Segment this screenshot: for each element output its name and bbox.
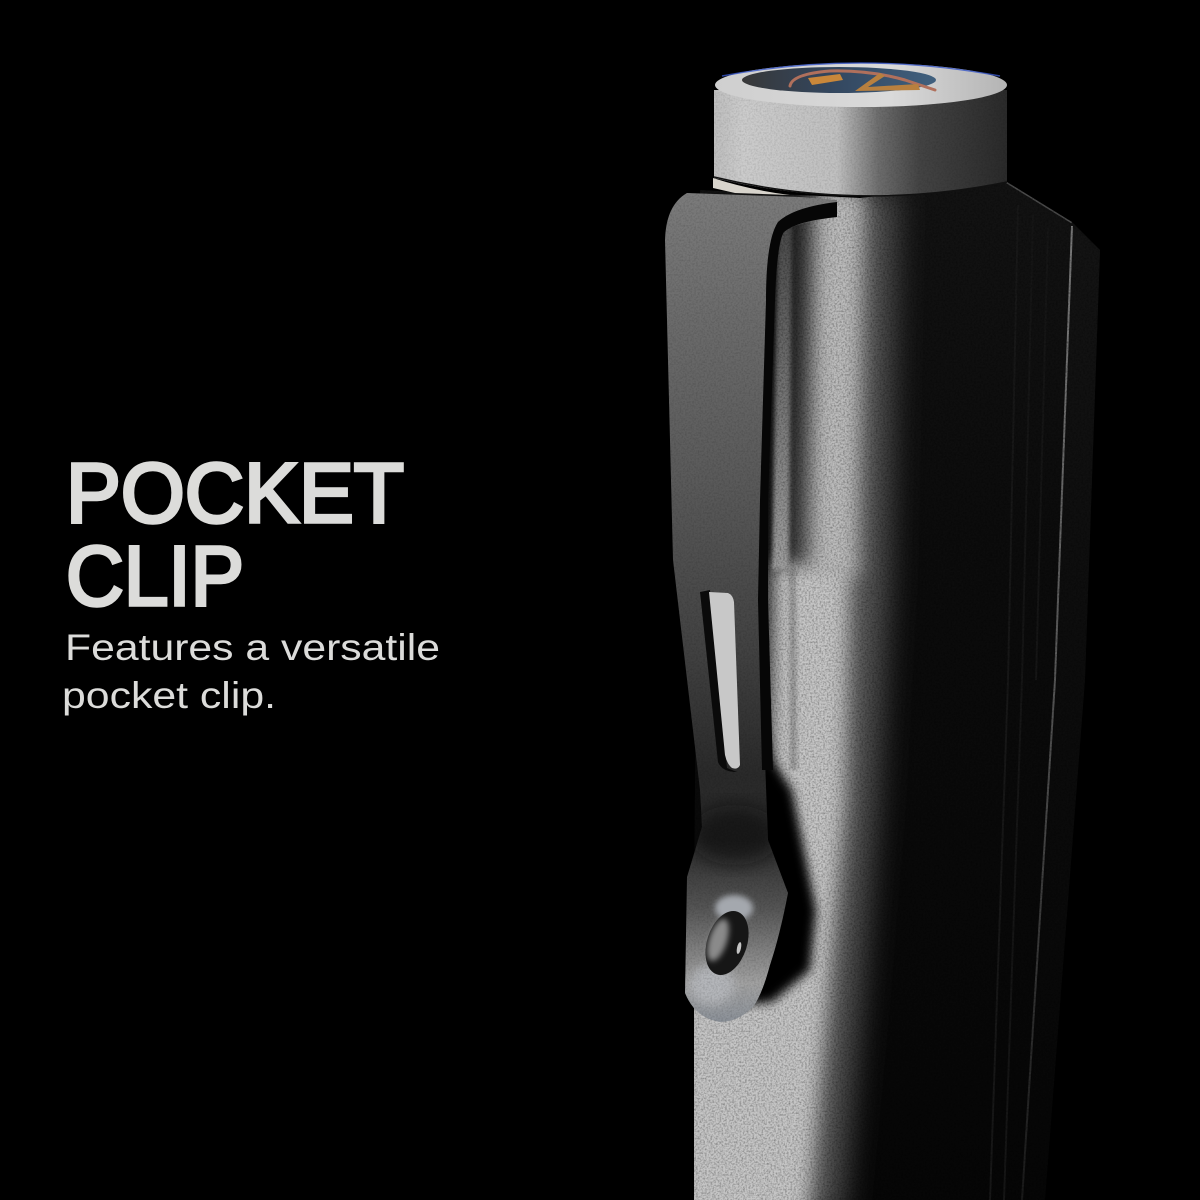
description (62, 627, 440, 716)
body grain texture (694, 184, 1073, 1200)
pen cap (713, 63, 1008, 210)
upper highlight (810, 190, 864, 575)
eyelet hole (736, 942, 742, 954)
heading: POCKET (66, 446, 404, 540)
slot shadow (700, 590, 737, 772)
clip slot (700, 590, 740, 772)
cap edge tint (722, 63, 1000, 76)
cap recess (742, 67, 936, 93)
heading (66, 446, 404, 623)
cap top face (715, 63, 1007, 107)
clip eyelet (698, 895, 756, 981)
lower highlight (680, 565, 850, 1200)
text block (62, 446, 440, 716)
cap grain texture (714, 90, 916, 195)
cap seam (714, 177, 1007, 196)
eyelet inner light (703, 916, 733, 964)
heading: CLIP (66, 529, 244, 623)
slot opening (709, 592, 740, 769)
cap side (714, 90, 1007, 196)
pocket clip (660, 190, 840, 1030)
description: Features a versatile (65, 627, 440, 668)
clip neck shading (690, 805, 780, 865)
upper left strip (772, 226, 792, 570)
cap logo (790, 71, 935, 91)
clip lobe light (690, 965, 734, 1005)
clip plate (660, 190, 840, 1025)
clip cast shadow (740, 700, 816, 1005)
clip black edge (758, 202, 837, 770)
eyelet halo (715, 895, 753, 921)
body faceted ridges (989, 182, 1073, 1200)
description: pocket clip. (62, 675, 276, 716)
cap seam highlight (713, 178, 790, 195)
eyelet dome (698, 905, 756, 981)
body shadow crease (789, 570, 797, 770)
clip grain texture (660, 190, 840, 1030)
pen body (680, 180, 1110, 1200)
body highlight falloff (769, 195, 912, 1200)
